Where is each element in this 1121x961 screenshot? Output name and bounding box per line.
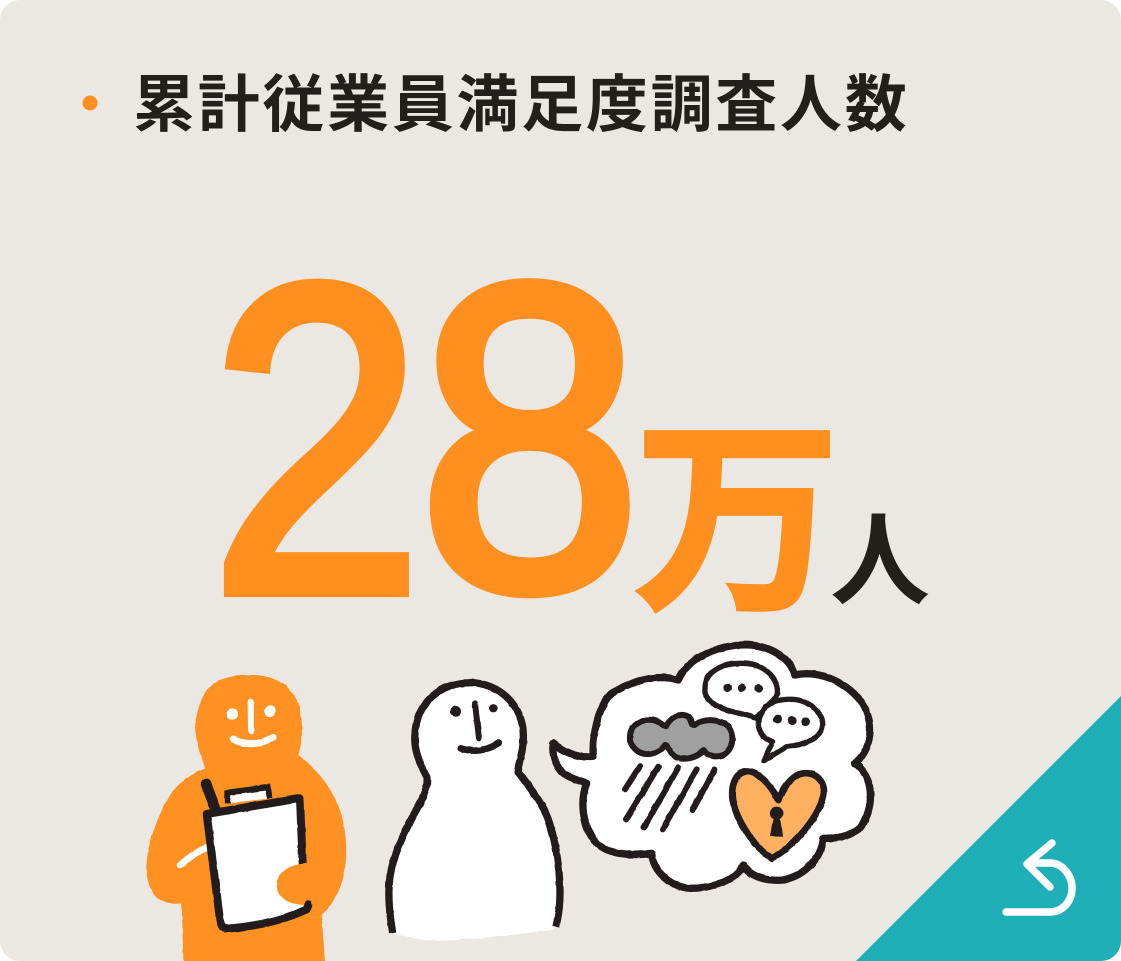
hand	[277, 860, 338, 905]
pen	[206, 784, 216, 810]
icon: speech bubble 2	[758, 699, 823, 761]
big number: 28万人	[210, 194, 930, 685]
face	[227, 702, 276, 744]
speech cloud	[553, 645, 870, 888]
clipboard lower edge	[225, 904, 308, 929]
icon: return arrow	[1006, 843, 1072, 912]
face	[450, 703, 499, 751]
clipboard clip	[227, 787, 270, 803]
big number: 28万人: 8	[418, 194, 642, 680]
arm line	[180, 847, 208, 865]
big number: 28万人: 2	[210, 195, 423, 685]
clipboard	[207, 798, 308, 929]
icon: locked heart	[732, 772, 824, 858]
illustration: white person	[389, 683, 560, 941]
corner: teal back button	[856, 696, 1121, 961]
icon: speech bubble 1	[705, 663, 777, 718]
icon: rain cloud	[625, 715, 732, 829]
big number: 28万人: 人	[830, 480, 930, 625]
big number: 28万人: 万	[634, 355, 840, 653]
illustration: orange person with clipboard	[146, 675, 346, 961]
heading with bullet: 累計従業員満足度調査人数	[133, 54, 909, 144]
